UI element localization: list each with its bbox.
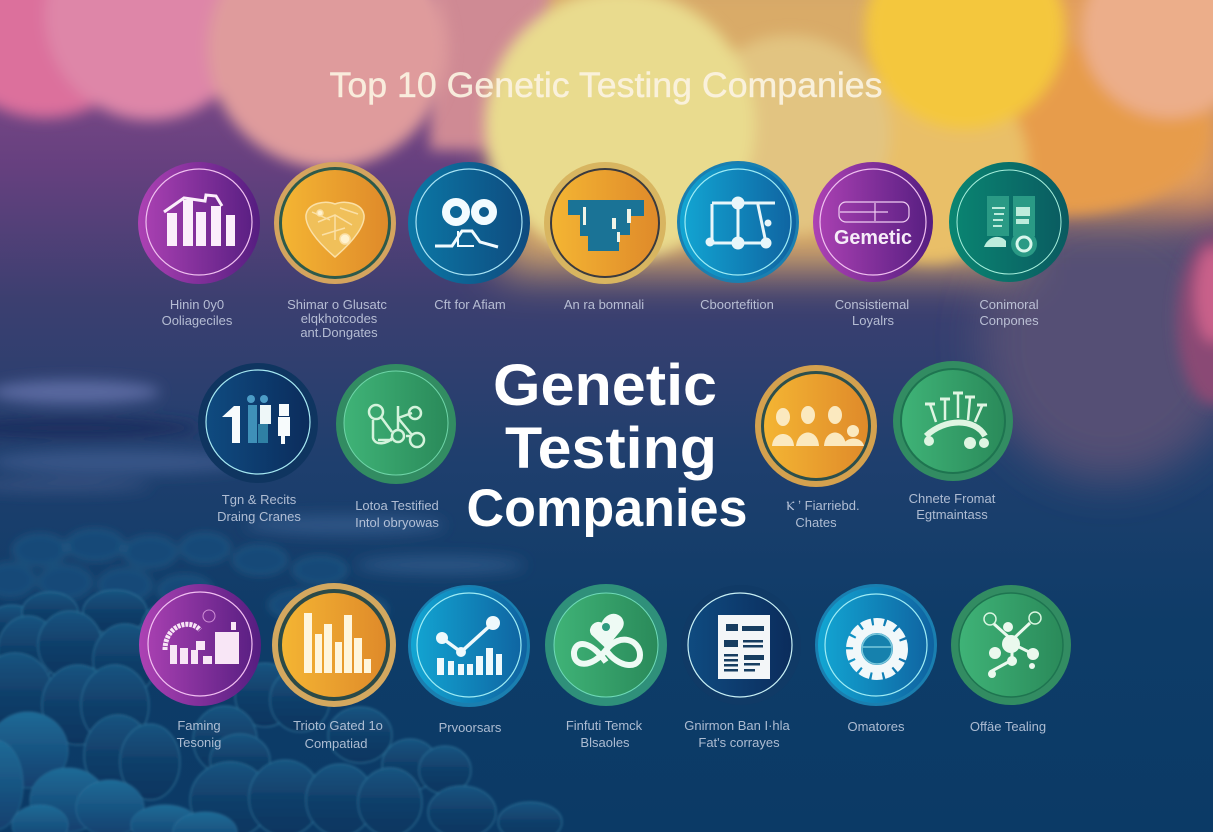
label: Ⲕ ʼ Fiarriebd. [786,498,860,513]
icon: group of people [772,406,864,446]
label: Tgn & Recits [222,492,297,507]
label: Loyalrs [852,313,894,328]
badge 7: teal documents [949,162,1069,328]
badge 16: navy document [681,585,801,750]
badge 15: green location knot [545,584,667,750]
label [835,297,909,328]
icon: heart map [306,202,364,257]
label: Consistiemal [835,297,909,312]
central heading: Genetic [493,353,717,418]
label: Intol obryowas [355,515,439,530]
icon: linked rings figure [435,202,498,247]
label: Conimoral [979,297,1039,312]
label: Prvoorsars [439,720,502,735]
icon: report page [718,615,770,679]
label [684,718,791,750]
label: Lotoa Testified [355,498,439,513]
label: Ooliageciles [162,313,233,328]
label [979,297,1039,328]
label: ant.Dongates [300,325,378,340]
icon: bar chart [164,195,235,246]
label: An ra bomnali [564,297,644,312]
icon: people [222,395,290,444]
badge 6: purple genetic [813,162,933,328]
label: Egtmaintass [916,507,988,522]
badge 12: purple blocks [139,584,261,750]
icon: city blocks [165,622,239,664]
title: Top 10 Genetic Testing Companies [330,66,882,105]
badge 4: orange chip [544,162,666,312]
label: Cft for Afiam [434,297,506,312]
icon: tree arch [925,393,987,436]
badge 14: blue line chart [408,585,530,735]
badge 9: green molecules [336,364,456,530]
label: Omatores [847,719,905,734]
label: Cboortefition [700,297,774,312]
label: Hinin 0y0 [170,297,224,312]
icon: network frame [706,197,775,249]
label [162,297,233,328]
icon: molecule [984,612,1041,678]
label: Fat's corrayes [698,735,780,750]
background: blurred cell texture [0,380,562,832]
label: Shimar o Glusatc [287,297,387,312]
label [287,297,387,340]
label: Chates [795,515,837,530]
badge 8: navy people [198,363,318,524]
label [355,498,439,530]
icon: molecule network [369,405,424,447]
icon: bar chart [304,613,371,673]
label: Finfuti Temck [566,718,643,733]
label: Faming [177,718,221,733]
label: Draing Cranes [217,509,301,524]
label [177,718,221,750]
label: Offäe Tealing [970,719,1046,734]
label: Trioto Gated 1o [293,718,383,733]
badge 13: orange bar chart [272,583,396,751]
badge 18: green molecule [951,585,1071,734]
label [293,718,383,751]
label: Chnete Fromat [909,491,996,506]
icon: documents and seal [984,196,1037,257]
label [566,718,643,750]
label: elqkhotcodes [301,311,378,326]
icon: gear [853,625,901,673]
icon: trend with bars [436,616,502,675]
central heading: Testing [505,416,717,481]
badge 5: blue network [677,161,799,312]
label: Tesonig [177,735,221,750]
badge 1: purple bars [138,162,260,328]
icon: teal chip [568,200,644,251]
label [909,491,996,522]
label: Conpones [979,313,1039,328]
central heading: Companies [466,479,748,538]
badge 2: orange heart [274,162,396,340]
badge 11: green arch [893,361,1013,522]
central heading [466,353,748,538]
badge 17: blue gear [815,584,937,734]
badge 3: blue glasses [408,162,530,312]
label [217,492,301,524]
badge 10: orange people [755,365,877,530]
label: Gnirmon Ban I·hla [684,718,791,733]
label: Compatiad [305,736,367,751]
icon: infinity pin [574,615,640,665]
icon: capsule [839,202,909,222]
label [786,498,860,530]
label: Blsaoles [580,735,630,750]
badge word: Gemetic [834,227,912,249]
